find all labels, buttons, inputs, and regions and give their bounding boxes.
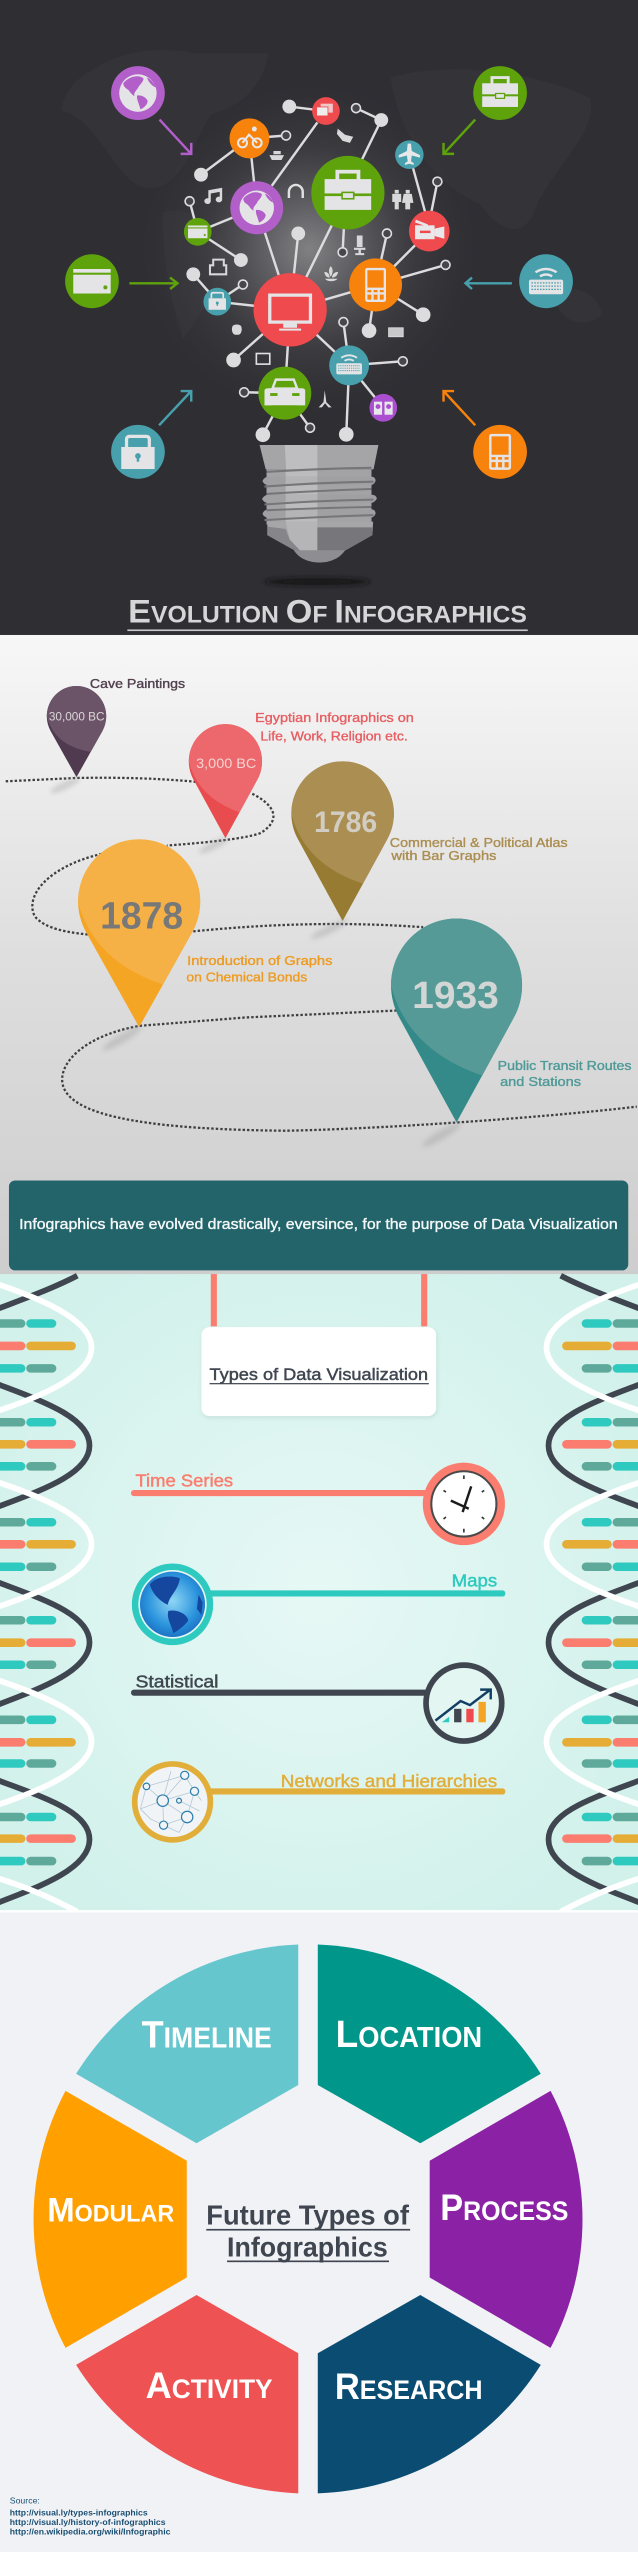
icon: speakers (369, 394, 397, 422)
icon: tv (256, 354, 270, 364)
source credits: http://visual.ly/types-infographics (10, 2508, 148, 2517)
caption: atlas: Commercial & Political Atlas (390, 835, 568, 850)
icon: network (132, 1761, 213, 1843)
row: time series: Time Series (135, 1471, 233, 1490)
center heading (206, 2199, 410, 2262)
icon: small lock (203, 288, 231, 316)
icon: bike (229, 118, 269, 158)
icon: teal keyboard (519, 254, 573, 308)
source credits: Source: (10, 2496, 40, 2505)
caption: egyptian (255, 710, 414, 744)
panel: future types (0, 1912, 638, 2552)
icon: plant (324, 266, 338, 281)
pin: 1933 (391, 919, 522, 1122)
icon: apple (232, 325, 242, 335)
icon: orange phone (473, 425, 527, 479)
segment: location (318, 1944, 541, 2143)
caption: graphs (186, 953, 333, 985)
pin: 1786 (291, 761, 394, 921)
icon: hand (337, 129, 353, 143)
row: networks and hierarchies (132, 1761, 505, 1843)
caption: egyptian: Egyptian Infographics on (255, 710, 414, 725)
pin: 3,000 BC: 3,000 BC (196, 756, 257, 771)
segment: research: RESEARCH (335, 2366, 483, 2407)
segment: timeline (76, 1944, 298, 2143)
row: statistical: Statistical (135, 1673, 219, 1692)
world map backdrop (61, 50, 602, 339)
caption: graphs: on Chemical Bonds (186, 969, 308, 985)
row: statistical (131, 1665, 502, 1741)
icon: headphones (289, 185, 303, 198)
source credits (10, 2496, 171, 2537)
row: maps (132, 1563, 505, 1645)
center heading: Infographics (227, 2231, 388, 2262)
illustration: light bulb base (260, 445, 378, 562)
pin: 30,000 BC: 30,000 BC (49, 711, 105, 723)
callout banner (9, 1180, 628, 1270)
caption: cave paintings: Cave Paintings (90, 676, 186, 691)
DNA helix left (0, 1276, 92, 1912)
source credits: http://visual.ly/history-of-infographics (10, 2518, 166, 2527)
pin: 1786: 1786 (314, 806, 377, 839)
caption: transit: and Stations (500, 1074, 582, 1089)
icon: green card (65, 254, 119, 308)
connector network (185, 100, 450, 442)
callout banner: Infographics have evolved drastically, eversince, for the purpose of Data Visualization (19, 1217, 618, 1233)
segment: location: LOCATION (336, 2013, 482, 2056)
pin: 1933: 1933 (412, 975, 499, 1017)
source credits: http://en.wikipedia.org/wiki/Infographic (10, 2527, 171, 2537)
icon: ship (269, 151, 284, 160)
icon: car (258, 367, 311, 420)
caption: atlas (390, 835, 568, 863)
segment: timeline: TIMELINE (142, 2014, 272, 2057)
timeline captions (90, 676, 632, 1089)
arrows (129, 120, 512, 425)
segment: process (430, 2091, 582, 2348)
light glow (138, 82, 480, 416)
pin: 1878 (78, 839, 200, 1027)
small floating icons (204, 129, 413, 407)
icon: clock (423, 1463, 505, 1545)
icon: central briefcase (311, 156, 385, 229)
caption: egyptian: Life, Work, Religion etc. (260, 729, 408, 744)
row: time series (131, 1463, 505, 1545)
row: networks and hierarchies: Networks and Hierarchies (281, 1772, 497, 1791)
icon: globe (132, 1563, 213, 1645)
segment: activity (76, 2295, 298, 2493)
center heading: Future Types of (206, 2199, 410, 2230)
dotted timeline path (6, 778, 637, 1131)
icon: music note (204, 188, 222, 204)
segment: modular (34, 2091, 187, 2348)
panel: evolution header (0, 0, 638, 636)
segment: process: PROCESS (440, 2187, 568, 2228)
caption: atlas: with Bar Graphs (390, 848, 497, 863)
icon: purple globe (111, 66, 165, 120)
icon: microphone (354, 236, 365, 255)
pin: 3,000 BC (189, 724, 262, 838)
icon: chart (426, 1665, 502, 1741)
segment: research (318, 2295, 541, 2493)
DNA helix right (546, 1276, 638, 1912)
caption: graphs: Introduction of Graphs (187, 953, 333, 968)
icon: plane (395, 140, 424, 169)
pin: 1878: 1878 (100, 895, 183, 938)
caption: transit: Public Transit Routes (498, 1058, 632, 1073)
icon: camera (409, 211, 450, 251)
icon: people (392, 190, 413, 209)
panel: types of data visualization (0, 1274, 638, 1912)
pin: 30,000 BC (47, 686, 106, 777)
icon: eiffel tower (319, 390, 332, 407)
icon: envelope (389, 328, 403, 337)
icon: teal lock (111, 425, 165, 479)
panel: timeline (0, 635, 638, 1280)
row: maps: Maps (452, 1571, 497, 1590)
icon: green briefcase (473, 66, 527, 120)
caption: transit (498, 1058, 632, 1089)
icon: red monitor (253, 273, 327, 347)
hanging sign: Types of Data Visualization (210, 1366, 428, 1384)
icon: small keyboard (329, 345, 369, 385)
pin shadows (49, 775, 463, 1150)
segment: modular: MODULAR (47, 2191, 174, 2229)
icon: central globe (230, 181, 283, 234)
segment: activity: ACTIVITY (146, 2365, 273, 2406)
bulb shadow (264, 578, 370, 585)
title: EVOLUTION OF INFOGRAPHICS (128, 592, 527, 630)
icon: chat (312, 97, 340, 125)
icon: sofa (210, 260, 226, 274)
icon: small card (184, 218, 212, 246)
hanging sign (201, 1274, 437, 1418)
icon: central phone (349, 258, 402, 311)
